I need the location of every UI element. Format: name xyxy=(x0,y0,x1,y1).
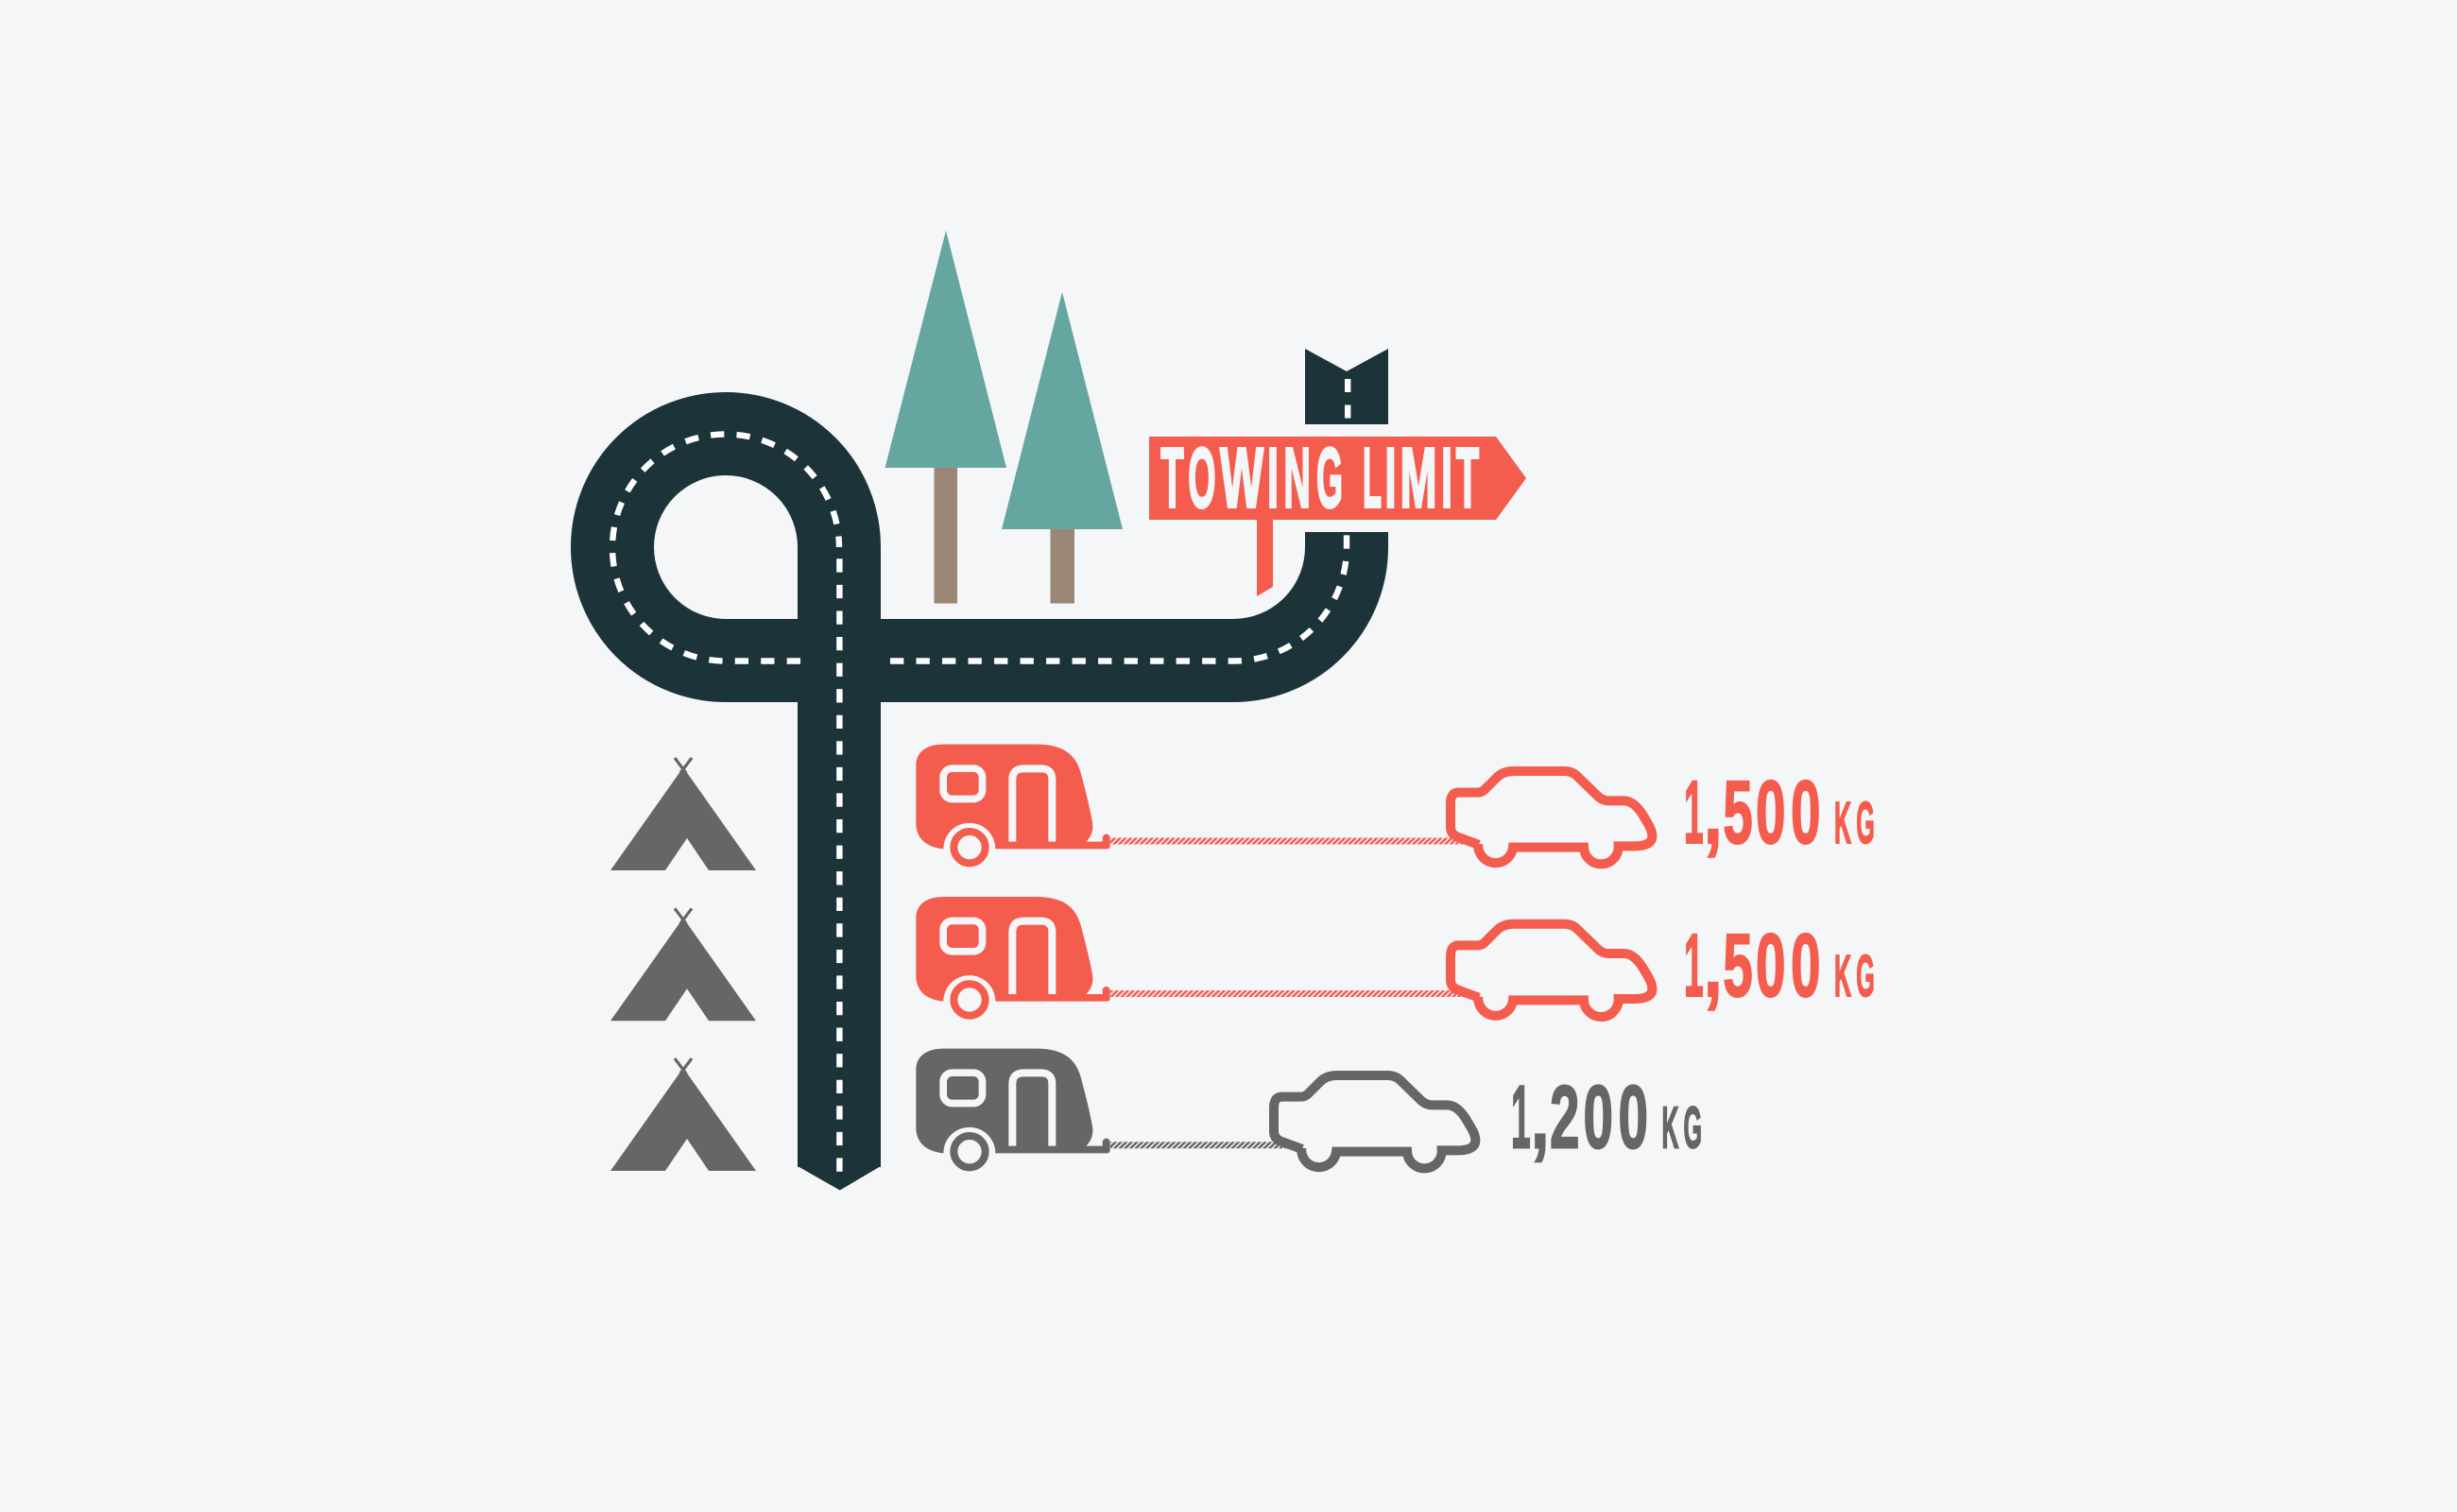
row 1: tow line xyxy=(1110,837,1464,845)
row 3: weight 1,200 kg: 0 xyxy=(1584,1068,1613,1168)
row 3: tent xyxy=(610,1058,756,1171)
infographic: towing limit: G xyxy=(1856,791,1875,856)
signpost: towing limit xyxy=(1149,431,1526,596)
row 1: weight 1,500 kg: 5 xyxy=(1723,763,1753,863)
signpost: towing limit: T xyxy=(1456,431,1479,525)
row 3: weight 1,200 kg: 1 xyxy=(1511,1068,1531,1168)
sign label: I xyxy=(1385,431,1397,525)
row 3: car xyxy=(1274,1075,1475,1168)
row 1: weight 1,500 kg: 0 xyxy=(1756,763,1786,863)
row 3: weight 1,200 kg: 2 xyxy=(1550,1068,1580,1168)
row 3: tow line xyxy=(1110,1142,1290,1148)
row 3: weight 1,200 kg: 0 xyxy=(1618,1068,1648,1168)
sign label: W xyxy=(1220,431,1263,525)
row 1: caravan xyxy=(916,745,1110,863)
road: loop and junction xyxy=(612,434,1347,1191)
row 3: caravan xyxy=(916,1049,1110,1167)
row 1: tent xyxy=(610,758,756,870)
row 1: weight 1,500 kg: K xyxy=(1834,791,1851,856)
sign label: M xyxy=(1400,431,1436,525)
row 3: weight 1,200 kg: , xyxy=(1531,1068,1549,1168)
row 2: weight 1,500 kg: 0 xyxy=(1756,916,1786,1016)
row 2: tent xyxy=(610,908,756,1021)
row 1: weight 1,500 kg: 1 xyxy=(1684,763,1704,863)
road: end section above sign xyxy=(1305,349,1388,424)
sign label: L xyxy=(1363,431,1382,525)
row 2: weight 1,500 kg: K xyxy=(1834,944,1851,1009)
row 2: car xyxy=(1451,924,1652,1017)
row 2: caravan xyxy=(916,897,1110,1016)
infographic: towing limit: G xyxy=(1856,944,1875,1009)
row 2: weight 1,500 kg: 5 xyxy=(1723,916,1753,1016)
row 1: weight 1,500 kg: 0 xyxy=(1791,763,1820,863)
row 1: car xyxy=(1451,771,1652,864)
row 2: tow line xyxy=(1110,990,1464,997)
sign label: T xyxy=(1160,431,1184,525)
sign label: N xyxy=(1283,431,1311,525)
tree: tall xyxy=(885,231,1006,603)
row 2: weight 1,500 kg: 1 xyxy=(1684,916,1704,1016)
row 3: weight 1,200 kg: K xyxy=(1661,1096,1678,1160)
sign label: G xyxy=(1316,431,1343,525)
sign label: O xyxy=(1188,431,1216,525)
infographic: towing limit: G xyxy=(1684,1096,1702,1160)
row 2: weight 1,500 kg: , xyxy=(1704,916,1722,1016)
row 3: weight 1,200 kg xyxy=(1511,1068,1702,1168)
row 1: weight 1,500 kg xyxy=(1684,763,1875,863)
tree: short xyxy=(1002,292,1123,603)
row 2: weight 1,500 kg: 0 xyxy=(1791,916,1820,1016)
sign label: I xyxy=(1441,431,1452,525)
row 2: weight 1,500 kg xyxy=(1684,916,1875,1016)
sign label: I xyxy=(1267,431,1279,525)
row 1: weight 1,500 kg: , xyxy=(1704,763,1722,863)
